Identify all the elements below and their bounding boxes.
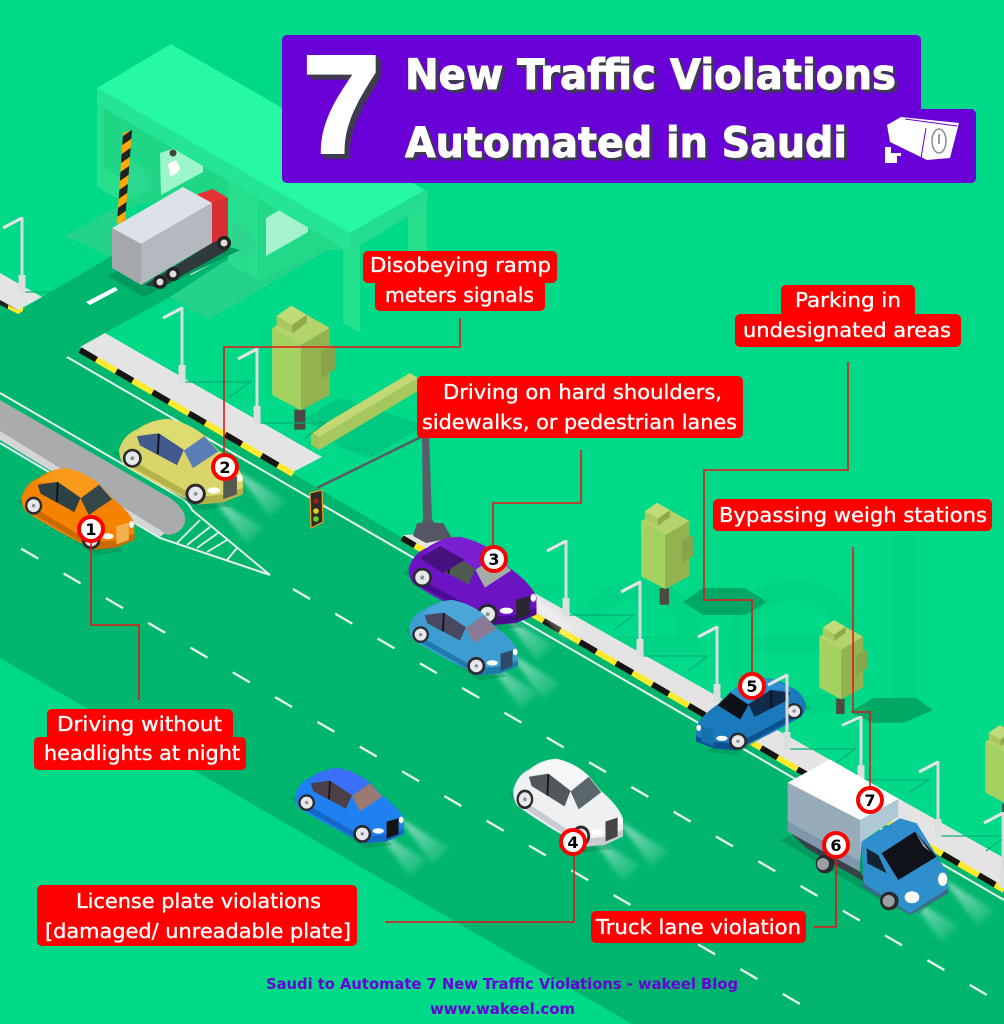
sidewalk left bbox=[0, 273, 42, 314]
sidewalk right bbox=[402, 534, 1004, 890]
truck 0: gray lorry bbox=[108, 187, 240, 297]
label 5: parking bbox=[735, 285, 961, 347]
island left bbox=[65, 207, 135, 257]
roof bbox=[97, 44, 425, 233]
lane mark bbox=[86, 259, 215, 305]
sidewalk centre bbox=[80, 333, 322, 474]
street lamp over car 5 bbox=[768, 674, 855, 764]
label 7: weigh stations bbox=[713, 499, 992, 531]
traffic light pole bbox=[317, 432, 452, 543]
lintel bbox=[97, 88, 350, 252]
badge 1 bbox=[79, 517, 103, 541]
footer: www.wakeel.com bbox=[430, 1000, 575, 1018]
label 5: parking: Parking in bbox=[795, 288, 901, 312]
badge 2: 2 bbox=[219, 458, 231, 477]
badge 3 bbox=[482, 547, 506, 571]
badge 7: 7 bbox=[864, 791, 876, 810]
barrier pole bbox=[117, 130, 132, 224]
badge 6 bbox=[824, 833, 848, 857]
car: blue sedan bbox=[290, 768, 449, 876]
road edge line bbox=[67, 357, 1004, 900]
tree 2 bbox=[641, 503, 767, 615]
car: light blue sedan bbox=[404, 600, 559, 709]
car 3: purple pickup bbox=[403, 537, 581, 661]
label 5: parking: undesignated areas bbox=[743, 318, 951, 342]
street lamps bbox=[3, 217, 1004, 902]
tree 4 bbox=[985, 725, 1004, 819]
right pillar front bbox=[343, 229, 360, 333]
leader lines bbox=[91, 318, 870, 927]
label 2: ramp meters: meters signals bbox=[385, 283, 534, 307]
watermark: wakeel logo: wakeel bbox=[60, 498, 940, 765]
title line 1: New Traffic Violations bbox=[405, 50, 896, 99]
middle pillar bbox=[228, 165, 258, 280]
icon: security camera bbox=[885, 117, 959, 163]
badge 2 bbox=[213, 455, 237, 479]
car 4: white SUV bbox=[508, 759, 668, 881]
big seven: 7 bbox=[303, 28, 380, 182]
label 4: license plate: License plate violations bbox=[76, 889, 321, 913]
island right bbox=[170, 223, 328, 320]
label 2: ramp meters bbox=[363, 251, 557, 311]
hedge bbox=[311, 373, 418, 450]
tree 1 bbox=[272, 306, 335, 430]
title panel bbox=[282, 28, 976, 183]
label 3: hard shoulders: sidewalks, or pedestrian lanes bbox=[422, 410, 737, 434]
badge 4 bbox=[561, 830, 585, 854]
badge 6: 6 bbox=[830, 836, 842, 855]
booth glass right bbox=[266, 208, 308, 256]
label 6: truck lane bbox=[591, 911, 806, 943]
label 1: headlights: headlights at night bbox=[44, 741, 240, 765]
badge 5: 5 bbox=[746, 677, 758, 696]
person bbox=[168, 150, 180, 176]
truck 6/7: blue cab box truck bbox=[780, 759, 948, 915]
label 3: hard shoulders: Driving on hard shoulders, bbox=[443, 380, 722, 404]
footer: Saudi to Automate 7 New Traffic Violations - wakeel Blog bbox=[266, 975, 738, 993]
toll gate bbox=[65, 44, 427, 333]
car 5: dark blue sedan bbox=[696, 678, 811, 755]
lane dashes bbox=[0, 524, 1004, 1005]
badge 4: 4 bbox=[567, 833, 579, 852]
label 3: hard shoulders bbox=[417, 376, 743, 438]
truck beams bbox=[909, 880, 994, 942]
badge 1: 1 bbox=[85, 520, 97, 539]
median bbox=[0, 393, 270, 575]
shadow under hedge and tree 1 bbox=[305, 398, 425, 458]
label 2: ramp meters: Disobeying ramp bbox=[370, 253, 551, 277]
label 4: license plate: [damaged/ unreadable plate] bbox=[45, 919, 351, 943]
label 7: weigh stations: Bypassing weigh stations bbox=[719, 503, 987, 527]
title line 2: Automated in Saudi bbox=[405, 118, 847, 167]
traffic light bbox=[310, 490, 323, 528]
label 6: truck lane: Truck lane violation bbox=[595, 915, 801, 939]
booth bbox=[122, 102, 228, 240]
badge 3: 3 bbox=[488, 550, 500, 569]
car 1: orange hatchback bbox=[16, 468, 134, 555]
car 2: olive wagon bbox=[113, 419, 286, 544]
label 1: headlights bbox=[34, 709, 246, 770]
booth glass bbox=[160, 147, 203, 195]
label 4: license plate bbox=[37, 885, 357, 946]
badge 7 bbox=[858, 788, 882, 812]
left pillar bbox=[97, 88, 122, 200]
footer bbox=[266, 975, 738, 1018]
badge 5 bbox=[740, 674, 764, 698]
label 1: headlights: Driving without bbox=[57, 712, 222, 736]
tree 3 bbox=[819, 620, 933, 723]
